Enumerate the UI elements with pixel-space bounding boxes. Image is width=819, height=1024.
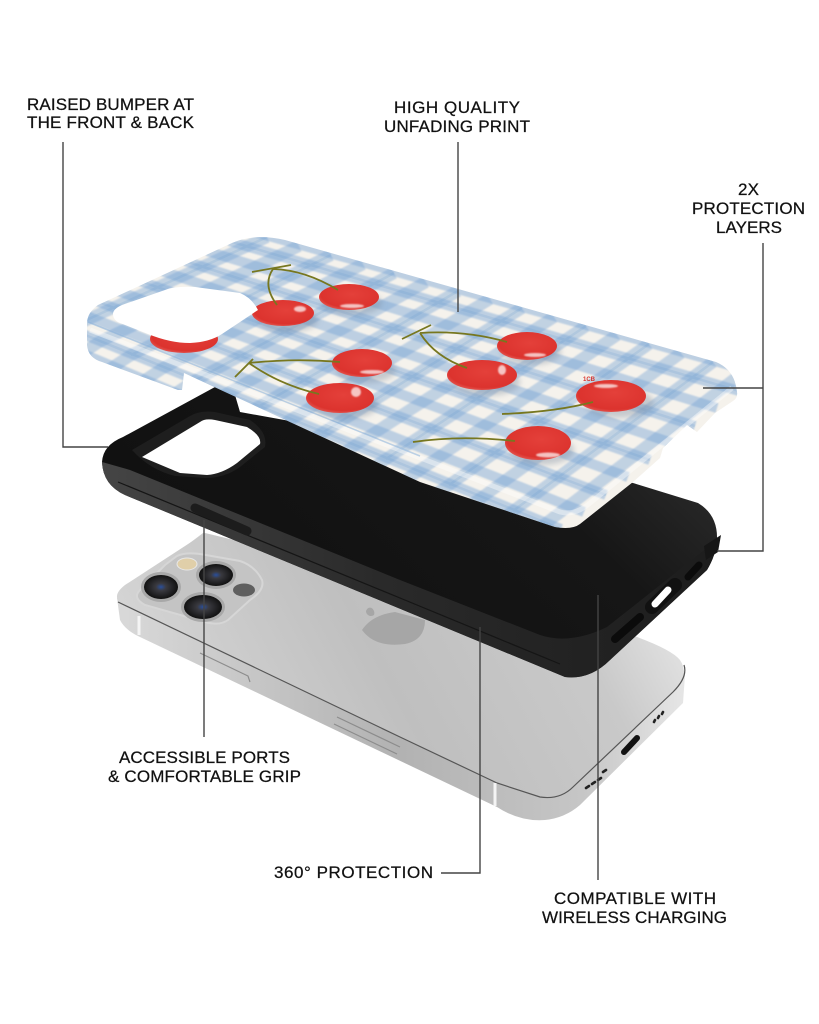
port rim [652, 585, 675, 607]
band streaks [51, 237, 739, 529]
leader: ports [203, 520, 205, 737]
across bands [87, 237, 736, 526]
label: protection layers: PROTECTION [692, 199, 805, 218]
label: raised bumper: RAISED BUMPER AT [27, 95, 194, 114]
case body [102, 386, 717, 677]
leader: wireless charging [597, 595, 599, 880]
camera opening [142, 419, 260, 475]
cherry highlights [294, 304, 618, 458]
lightning port [624, 738, 637, 752]
flash [177, 558, 197, 570]
case side band [102, 462, 717, 677]
along bands [87, 237, 738, 528]
label: protection layers [692, 180, 805, 237]
cherry shadows [258, 291, 654, 465]
iPhone [117, 533, 685, 820]
label: ports and grip: & COMFORTABLE GRIP [108, 767, 301, 786]
cream base [87, 238, 737, 528]
stems [235, 265, 593, 442]
lidar [233, 584, 255, 596]
camera lens 2 [196, 561, 236, 589]
label: 360 protection: 360° PROTECTION [274, 863, 433, 882]
label: raised bumper [27, 95, 195, 132]
speaker slot [615, 617, 640, 639]
cherries [150, 284, 646, 460]
label: ports and grip: ACCESSIBLE PORTS [119, 748, 290, 767]
side button [195, 508, 247, 531]
antenna bands [139, 616, 495, 806]
right corner tab [704, 535, 721, 560]
label: wireless charging: WIRELESS CHARGING [542, 908, 727, 927]
apple logo [362, 608, 425, 645]
label: wireless charging [542, 889, 727, 927]
phone edge highlight [118, 602, 685, 798]
black bumper case [102, 386, 721, 677]
label: print [384, 98, 530, 136]
port opening [655, 590, 668, 604]
speaker slot right [688, 565, 699, 577]
label: print: UNFADING PRINT [384, 117, 530, 136]
camera bump [137, 553, 262, 624]
label: ports and grip [108, 748, 301, 786]
leader: 360 protection [441, 627, 480, 873]
label: raised bumper: THE FRONT & BACK [27, 113, 195, 132]
leader: protection layers [703, 243, 763, 551]
label: wireless charging: COMPATIBLE WITH [554, 889, 716, 908]
lip blue line [88, 322, 420, 456]
camera lens 1 [141, 572, 181, 602]
phone body side [117, 533, 685, 820]
speaker holes [586, 712, 663, 788]
camera rim [132, 412, 265, 478]
camera lens 3 [181, 592, 225, 622]
sim tray and button [200, 653, 400, 754]
label: protection layers: 2X [738, 180, 759, 199]
side groove [118, 482, 560, 664]
phone back face [117, 533, 684, 798]
gingham printed case [87, 237, 738, 528]
leader: raised bumper [63, 142, 108, 447]
print case camera hole [113, 287, 258, 343]
brand mark: 1CB [583, 377, 596, 383]
label: protection layers: LAYERS [716, 218, 782, 237]
label: print: HIGH QUALITY [394, 98, 520, 117]
leader: print [457, 142, 459, 312]
leader lines [63, 142, 763, 880]
lip highlight [90, 330, 732, 513]
